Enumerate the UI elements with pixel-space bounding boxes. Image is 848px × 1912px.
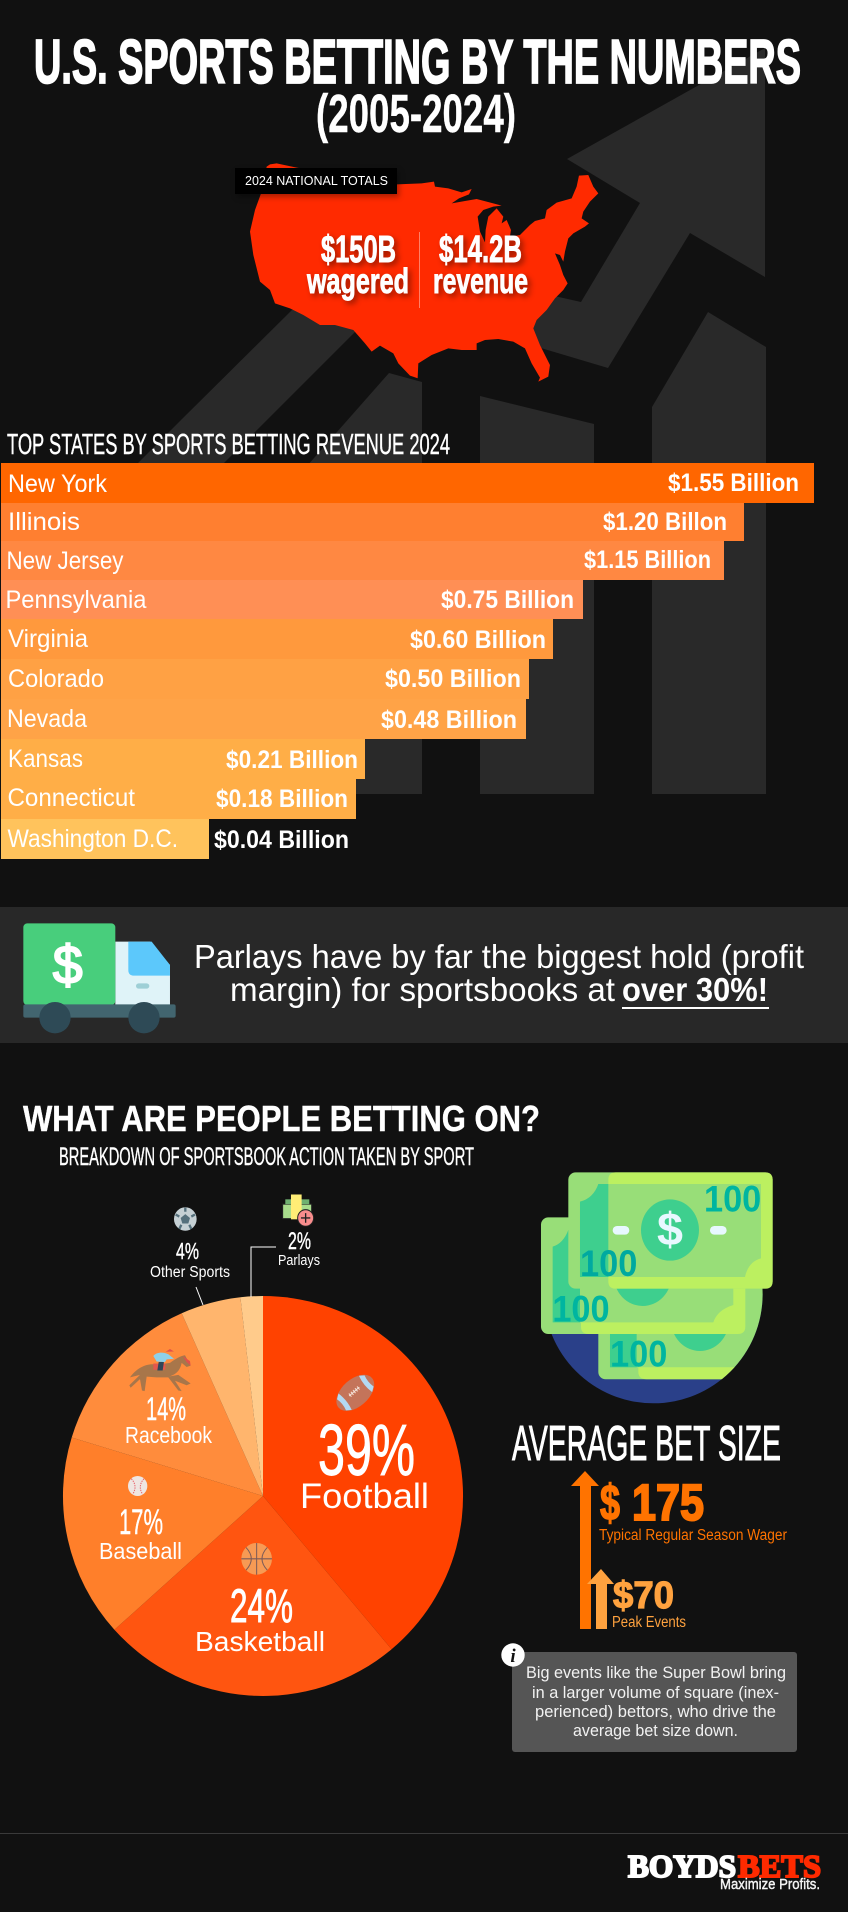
label: baseball	[99, 1503, 182, 1564]
label: football: Football	[300, 1477, 429, 1516]
bar: Washington D.C.: $0.04 Billion	[214, 826, 349, 854]
icon: info	[501, 1643, 525, 1667]
bar: Kansas: $0.21 Billion	[226, 746, 358, 774]
label: parlays: Parlays	[278, 1252, 320, 1269]
map of the United States	[250, 163, 598, 382]
bar: Pennsylvania: Pennsylvania	[6, 586, 147, 614]
stat: 175 regular season wager	[599, 1474, 787, 1544]
background growth arrow and bars	[95, 48, 766, 794]
icon: money truck	[23, 923, 176, 1033]
bar chart: state revenue	[1, 463, 814, 859]
bar: New York	[1, 463, 814, 503]
heading: what are people betting on: WHAT ARE PEOPLE BETTING ON?	[23, 1098, 540, 1139]
label: baseball: Baseball	[99, 1538, 182, 1564]
revenue total: $14.2B	[439, 229, 522, 271]
stat: 70 peak events	[612, 1575, 686, 1631]
bar: Nevada: Nevada	[7, 705, 87, 733]
bar: Connecticut	[1, 779, 356, 819]
stat: 70 peak events: Peak Events	[612, 1614, 686, 1631]
label: other sports: 4%	[176, 1238, 199, 1264]
bar: Kansas	[1, 739, 365, 779]
bar: Pennsylvania: $0.75 Billion	[441, 586, 574, 614]
top bill: 100	[704, 1178, 761, 1220]
bar: Pennsylvania	[1, 580, 583, 619]
bar: Connecticut: Connecticut	[8, 784, 135, 812]
middle bill: 100	[552, 1288, 610, 1330]
note text: perienced) bettors, who drive the	[535, 1703, 776, 1721]
heading: what are people betting on: BREAKDOWN OF SPORTSBOOK ACTION TAKEN BY SPORT	[59, 1143, 474, 1171]
bar: Colorado	[1, 659, 529, 699]
icon: football	[330, 1368, 381, 1418]
bar: New Jersey: New Jersey	[6, 547, 124, 575]
slice: other sports	[182, 1297, 263, 1496]
top bill	[568, 1172, 773, 1289]
logo: Boyds Bets: BETS	[738, 1848, 821, 1884]
note text: in a larger volume of square (inex-	[532, 1684, 779, 1702]
bar: Virginia: $0.60 Billion	[410, 626, 546, 654]
heading: what are people betting on	[23, 1098, 540, 1171]
lower bill: 100	[610, 1333, 667, 1375]
bar: Kansas: Kansas	[8, 745, 83, 773]
leader lines	[196, 1247, 276, 1305]
logo: Boyds Bets: BOYDS	[628, 1848, 736, 1884]
heading: top states: TOP STATES BY SPORTS BETTING REVENUE 2024	[7, 429, 450, 461]
label: other sports	[150, 1238, 230, 1281]
stat: 70 peak events: $70	[613, 1575, 674, 1617]
note text: average bet size down.	[573, 1722, 738, 1740]
panel: parlay callout	[0, 907, 848, 1043]
callout text: Parlays have by far the biggest hold (profit	[194, 938, 804, 975]
stat: 175 regular season wager: Typical Regular Season Wager	[599, 1527, 787, 1544]
slice: parlays	[240, 1296, 263, 1496]
label: parlays: 2%	[288, 1228, 311, 1255]
arrow: regular season	[571, 1471, 599, 1629]
stat: 175 regular season wager: 175	[632, 1474, 704, 1531]
label: baseball: 17%	[119, 1503, 163, 1542]
panel: info note	[501, 1643, 797, 1752]
national totals label	[235, 168, 397, 194]
bar: Washington D.C.: Washington D.C.	[8, 825, 178, 853]
bar: Illinois: Illinois	[8, 508, 80, 536]
wagered total: $150B	[321, 229, 396, 271]
bar: Colorado: $0.50 Billion	[385, 665, 521, 693]
bar: Virginia	[1, 619, 553, 659]
callout text: over 30%!	[622, 971, 768, 1008]
title	[34, 28, 801, 144]
bar: Illinois	[1, 503, 744, 541]
revenue total	[433, 229, 528, 301]
national totals label: 2024 NATIONAL TOTALS	[245, 173, 388, 188]
bar: Connecticut: $0.18 Billion	[216, 785, 348, 813]
slice: racebook	[72, 1313, 263, 1496]
icon: soccer ball	[174, 1207, 197, 1231]
icon: basketball	[241, 1543, 272, 1575]
label: parlays	[278, 1228, 320, 1269]
icon: parlay bills	[283, 1194, 314, 1226]
lower bill	[598, 1288, 763, 1380]
label: basketball	[195, 1579, 325, 1657]
icon: stack of money	[540, 1172, 773, 1404]
icon: money truck: $	[53, 937, 82, 996]
top bill: 100	[580, 1242, 637, 1284]
note text	[526, 1664, 786, 1740]
stat: 175 regular season wager: $	[600, 1475, 620, 1531]
label: racebook	[125, 1391, 212, 1448]
note text: Big events like the Super Bowl bring	[526, 1664, 786, 1682]
panel: national totals map	[235, 163, 598, 382]
slice: basketball	[114, 1496, 392, 1696]
pie chart: action by sport	[63, 1194, 463, 1696]
icon: info: i	[510, 1646, 516, 1667]
revenue total: revenue	[433, 262, 528, 301]
bar: Colorado: Colorado	[8, 665, 104, 693]
title: (2005-2024)	[316, 84, 516, 144]
label: football	[300, 1411, 429, 1516]
bar: New York: New York	[8, 470, 107, 498]
bar: Nevada	[1, 699, 526, 739]
callout text: margin) for sportsbooks at	[230, 971, 615, 1008]
label: football: 39%	[318, 1411, 415, 1491]
wagered total	[306, 229, 409, 301]
bar: New York: $1.55 Billion	[668, 469, 799, 497]
wagered total: wagered	[306, 262, 409, 301]
bar: New Jersey: $1.15 Billion	[584, 546, 711, 574]
bar: Nevada: $0.48 Billion	[381, 706, 517, 734]
label: racebook: Racebook	[125, 1422, 212, 1448]
bar: Washington D.C.	[1, 819, 349, 859]
bar: Virginia: Virginia	[8, 625, 88, 653]
icon: racehorse and jockey	[129, 1349, 191, 1391]
logo: Boyds Bets	[628, 1848, 821, 1893]
middle bill	[541, 1217, 745, 1334]
slice: football	[263, 1296, 463, 1649]
bar: New Jersey	[1, 541, 724, 580]
icon: baseball	[128, 1476, 147, 1496]
callout text	[194, 938, 804, 1009]
label: basketball: 24%	[230, 1579, 293, 1632]
bar: Illinois: $1.20 Billon	[603, 508, 727, 536]
logo: Boyds Bets: Maximize Profits.	[720, 1876, 820, 1893]
slice: baseball	[63, 1438, 263, 1630]
arrow: peak events	[587, 1569, 614, 1629]
label: basketball: Basketball	[195, 1626, 325, 1657]
top bill: $	[657, 1203, 683, 1255]
label: racebook: 14%	[146, 1391, 186, 1427]
label: other sports: Other Sports	[150, 1264, 230, 1281]
